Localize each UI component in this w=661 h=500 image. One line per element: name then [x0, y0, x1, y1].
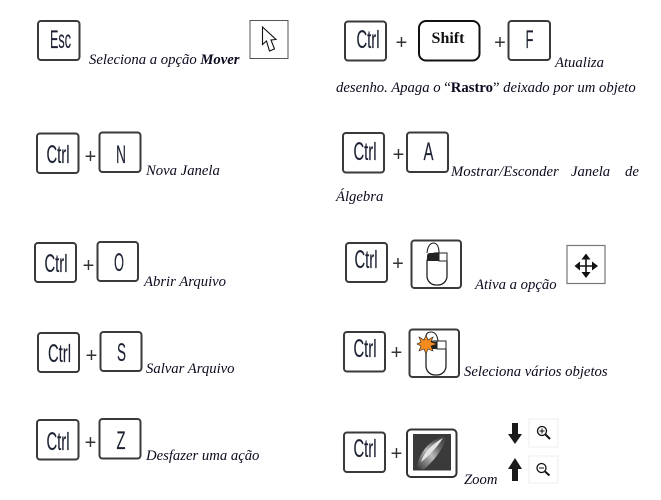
shortcut: Ctrl+mouse click: Seleciona vários objetos: [464, 364, 608, 380]
shortcut: Ctrl+A: Janela: [571, 164, 610, 180]
icon: mouse left button: [427, 243, 447, 285]
icon: zoom in: [529, 419, 558, 447]
shortcut: Ctrl+mouse drag: +: [392, 253, 404, 275]
shortcut: Ctrl+Shift+F: +: [494, 32, 506, 54]
shortcut: Ctrl+N: +: [85, 146, 96, 168]
shortcut: Ctrl+O: +: [83, 255, 94, 277]
shortcut: Ctrl+A: A: [424, 138, 434, 166]
shortcut: Ctrl+wheel zoom: [344, 419, 558, 488]
shortcut: Ctrl+S: Salvar Arquivo: [146, 361, 235, 377]
icon: move arrows: [574, 254, 598, 278]
shortcut: Ctrl+A: +: [393, 144, 404, 166]
shortcut: Ctrl+O: Abrir Arquivo: [143, 274, 226, 290]
shortcut: Ctrl+Shift+F: Atualiza: [554, 55, 604, 71]
icon: arrow up: [508, 458, 522, 481]
shortcut: Esc: Seleciona a opção Mover: [89, 52, 240, 68]
shortcut: Ctrl+Shift+F: [336, 21, 636, 96]
shortcut: Ctrl+A: de: [625, 164, 639, 180]
icon: arrow down: [508, 423, 522, 444]
shortcut: Ctrl+mouse click: Ctrl: [354, 335, 376, 363]
shortcut: Ctrl+O: [35, 242, 226, 290]
shortcut: Ctrl+S: [38, 332, 235, 377]
shortcut: Ctrl+A: Ctrl: [354, 138, 376, 166]
shortcut: Ctrl+wheel zoom: Ctrl: [354, 435, 376, 463]
shortcut: Ctrl+Z: [37, 419, 259, 464]
shortcut: Ctrl+N: N: [116, 141, 126, 169]
shortcut: Ctrl+Shift+F: F: [526, 26, 534, 54]
shortcut: Ctrl+Z: Desfazer uma ação: [145, 448, 259, 464]
shortcut: Ctrl+N: Ctrl: [46, 141, 70, 169]
shortcut: Ctrl+wheel zoom: Zoom: [464, 472, 497, 488]
shortcut: Esc: [38, 20, 288, 68]
shortcut: Ctrl+Shift+F: desenho. Apaga o “Rastro” deixado por um objeto: [336, 80, 636, 96]
shortcut: Ctrl+A: Mostrar/Esconder: [450, 164, 559, 180]
shortcut: Ctrl+N: Nova Janela: [145, 163, 220, 179]
shortcut: Ctrl+Shift+F: +: [396, 32, 407, 54]
shortcut: Esc: Esc: [50, 26, 71, 54]
shortcut: Ctrl+mouse drag: Ctrl: [354, 246, 378, 274]
icon: mouse with click burst: [417, 332, 446, 375]
shortcut: Ctrl+A: Álgebra: [335, 188, 383, 205]
shortcut: Ctrl+Shift+F: Ctrl: [356, 26, 380, 54]
shortcut: Ctrl+S: +: [86, 345, 97, 367]
shortcut: Ctrl+A: [335, 132, 639, 205]
shortcut: Ctrl+mouse drag: [346, 240, 605, 293]
shortcut: Ctrl+Shift+F: Shift: [432, 30, 465, 47]
shortcut: Ctrl+S: S: [117, 339, 126, 367]
shortcut: Ctrl+mouse click: [344, 330, 608, 380]
shortcut: Ctrl+Z: Z: [116, 427, 126, 455]
shortcut: Ctrl+O: O: [114, 249, 124, 277]
icon: zoom out: [529, 456, 558, 483]
shortcut: Ctrl+mouse drag: Ativa a opção: [474, 277, 557, 293]
shortcut: Ctrl+N: [37, 132, 220, 179]
icon: mouse wheel: [413, 434, 451, 470]
shortcut: Ctrl+mouse click: +: [391, 342, 402, 364]
shortcut: Ctrl+Z: +: [85, 432, 96, 454]
shortcut: Ctrl+Z: Ctrl: [46, 428, 70, 456]
shortcut: Ctrl+wheel zoom: +: [391, 443, 402, 465]
shortcut: Ctrl+S: Ctrl: [48, 340, 71, 368]
shortcut: Ctrl+O: Ctrl: [44, 250, 68, 278]
